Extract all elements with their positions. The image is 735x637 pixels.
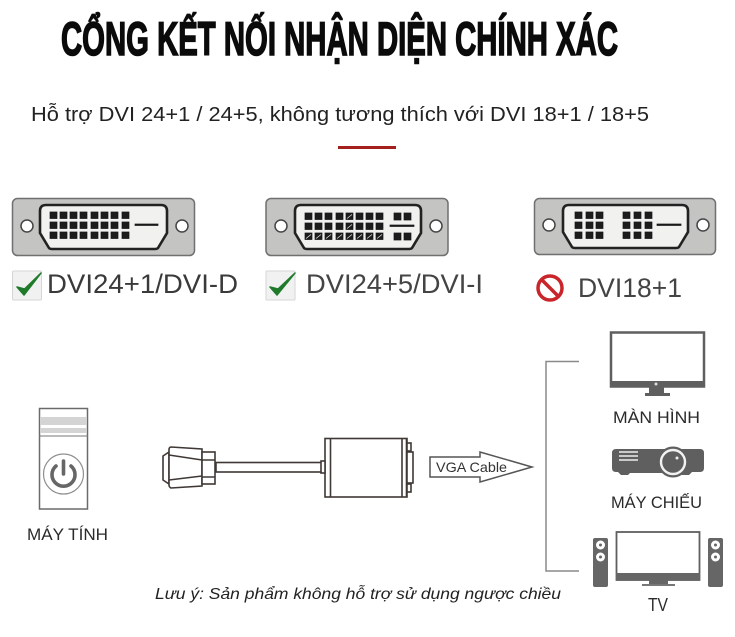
adapter box (321, 438, 413, 497)
bracket connector (546, 362, 579, 571)
icon: monitor (610, 332, 705, 396)
arrow: VGA Cable (430, 452, 532, 482)
VGA plug (163, 447, 215, 488)
icon: projector (612, 446, 704, 478)
icon: computer tower (39, 408, 88, 509)
subtitle: Hỗ trợ DVI 24+1 / 24+5, không tương thích với DVI 18+1 / 18+5 (31, 103, 649, 126)
label: DVI18+1 with prohibition sign: DVI18+1 (578, 273, 682, 303)
panel: DVI 24+5 connector (266, 198, 448, 256)
icon: TV with speakers (593, 532, 723, 587)
label: monitor: MÀN HÌNH (613, 408, 700, 427)
cable line (216, 462, 326, 472)
note: Lưu ý: Sản phẩm không hỗ trợ sử dụng ngược chiều (155, 584, 561, 603)
label: DVI24+1/DVI-D with check: DVI24+1/DVI-D (47, 269, 238, 299)
panel: DVI 24+1 connector (12, 198, 194, 256)
arrow: VGA Cable: VGA Cable (436, 459, 507, 475)
cable illustration (163, 438, 413, 497)
label: TV: TV (648, 595, 668, 615)
panel: DVI 18+1 connector (534, 198, 716, 254)
label: computer: MÁY TÍNH (27, 525, 108, 544)
label: projector: MÁY CHIẾU (611, 493, 702, 512)
label: DVI24+5/DVI-I with check: DVI24+5/DVI-I (306, 269, 483, 299)
red divider (338, 146, 396, 149)
